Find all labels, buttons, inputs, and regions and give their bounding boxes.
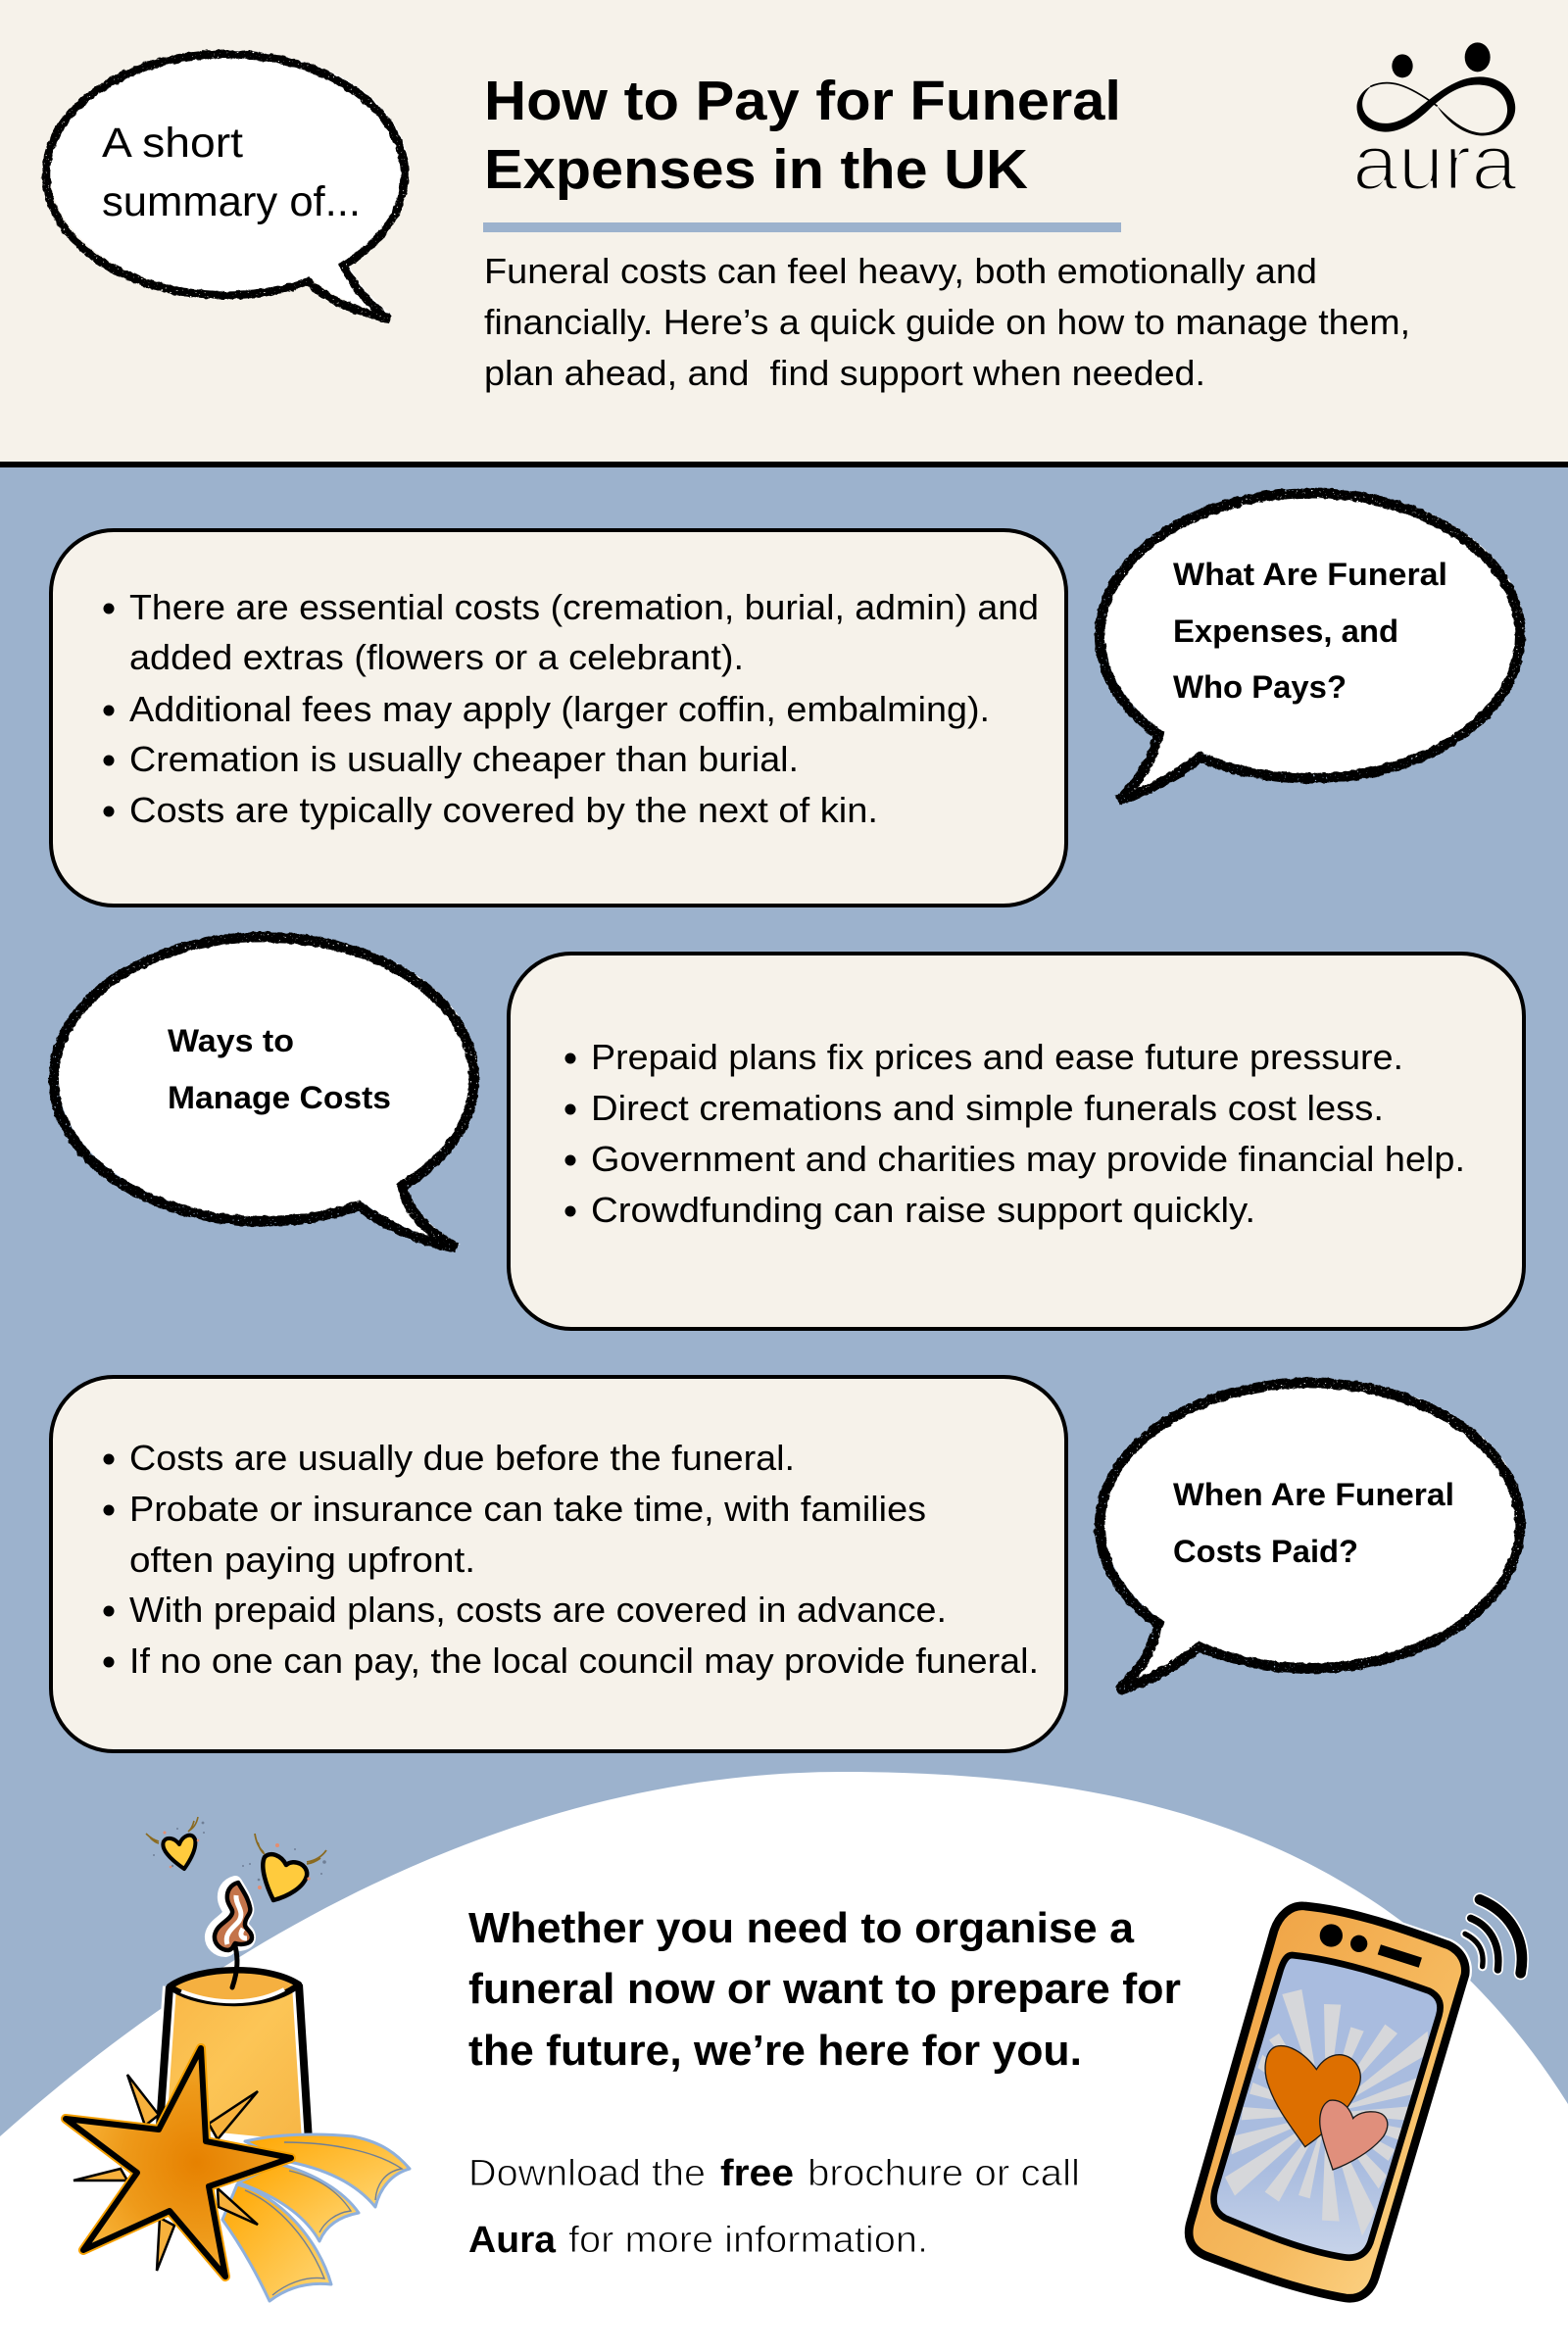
panel: what are funeral expenses [51,530,1066,906]
call to action text: Download the [468,2153,706,2194]
icon: small heart [146,1817,205,1869]
title: Expenses in the UK [484,138,1028,201]
icon: orange heart [1265,2046,1360,2147]
intro paragraph: plan ahead, and find support when needed. [484,353,1205,393]
ribbon inner lines [245,2142,402,2295]
panel: when are costs paid: often paying upfront. [129,1540,475,1580]
speech bubble: what are funeral expenses: Who Pays? [1173,669,1347,705]
closing message [468,1904,1181,2075]
title underline bar [483,222,1121,232]
icon: camera and speaker [1320,1924,1420,1963]
intro paragraph: financially. Here’s a quick guide on how to manage them, [484,302,1410,342]
speech bubble: a short summary of: A short [102,120,243,167]
speech bubble: what are funeral expenses: Expenses, and [1173,613,1398,649]
icon: star tail ribbons [222,2134,410,2301]
title [484,70,1121,201]
header background [0,0,1568,463]
speech bubble: when are funeral costs paid: Costs Paid? [1173,1534,1358,1569]
panel: what are funeral expenses: Additional fees may apply (larger coffin, embalming). [129,689,990,729]
intro paragraph [484,251,1410,393]
call to action text: Aura [468,2220,557,2261]
panel: what are funeral expenses: Cremation is usually cheaper than burial. [129,739,799,779]
panel: when are costs paid: If no one can pay, the local council may provide funeral. [129,1641,1039,1681]
icon: flame [212,1883,252,1950]
logo: aura [1352,42,1518,206]
call to action text: brochure or call [808,2153,1080,2194]
icon: star [66,2048,291,2277]
speech bubble: when are funeral costs paid: When Are Funeral [1173,1477,1454,1512]
illustration: candle and shooting star [66,1817,410,2301]
panel: ways to manage costs: Direct cremations and simple funerals cost less. [591,1088,1384,1128]
speech bubble: ways to manage costs: Ways to [168,1023,294,1058]
speech bubble: when are funeral costs paid [1103,1380,1524,1687]
icon: phone screen [1213,1955,1441,2258]
speech bubble: what are funeral expenses [1103,490,1524,797]
icon: large heart [242,1834,326,1900]
speech bubble: ways to manage costs [58,934,478,1245]
panel: when are costs paid: With prepaid plans, costs are covered in advance. [129,1590,947,1630]
icon: signal waves [1465,1899,1522,1973]
panel: when are costs paid: Costs are usually due before the funeral. [129,1438,795,1478]
panel: ways to manage costs: Government and charities may provide financial help. [591,1139,1465,1179]
closing message: Whether you need to organise a [468,1904,1135,1952]
white arc footer background [0,1772,1568,2352]
closing message: funeral now or want to prepare for [468,1965,1181,2013]
panel: ways to manage costs: Crowdfunding can raise support quickly. [591,1190,1255,1230]
call to action text [468,2153,1080,2261]
panel: when are costs paid: Probate or insurance can take time, with families [129,1489,926,1529]
panel: what are funeral expenses: added extras (flowers or a celebrant). [129,637,744,677]
illustration: phone with hearts [1189,1899,1522,2298]
logo wordmark: aura [1352,119,1518,206]
intro paragraph: Funeral costs can feel heavy, both emotionally and [484,251,1317,291]
header divider line [0,462,1568,467]
speech bubble: ways to manage costs: Manage Costs [168,1080,391,1115]
speech bubble: what are funeral expenses: What Are Funeral [1173,557,1447,592]
closing message: the future, we’re here for you. [468,2027,1082,2075]
call to action text: for more information. [568,2220,928,2261]
icon: logo heads and infinity [1357,42,1515,135]
panel: when are costs paid [51,1377,1066,1751]
icon: candle body [160,1946,309,2141]
speech bubble: a short summary of [50,51,409,316]
panel: what are funeral expenses: There are essential costs (cremation, burial, admin) and [129,587,1039,627]
speech bubble: a short summary of: summary of... [102,178,361,225]
panel: ways to manage costs [509,954,1524,1329]
icon: pink heart [1320,2100,1388,2170]
panel: ways to manage costs: Prepaid plans fix prices and ease future pressure. [591,1037,1403,1077]
icon: back star spikes [74,2075,258,2271]
title: How to Pay for Funeral [484,70,1121,132]
call to action text: free [720,2153,794,2194]
panel: what are funeral expenses: Costs are typically covered by the next of kin. [129,790,878,830]
icon: phone body [1189,1906,1465,2298]
